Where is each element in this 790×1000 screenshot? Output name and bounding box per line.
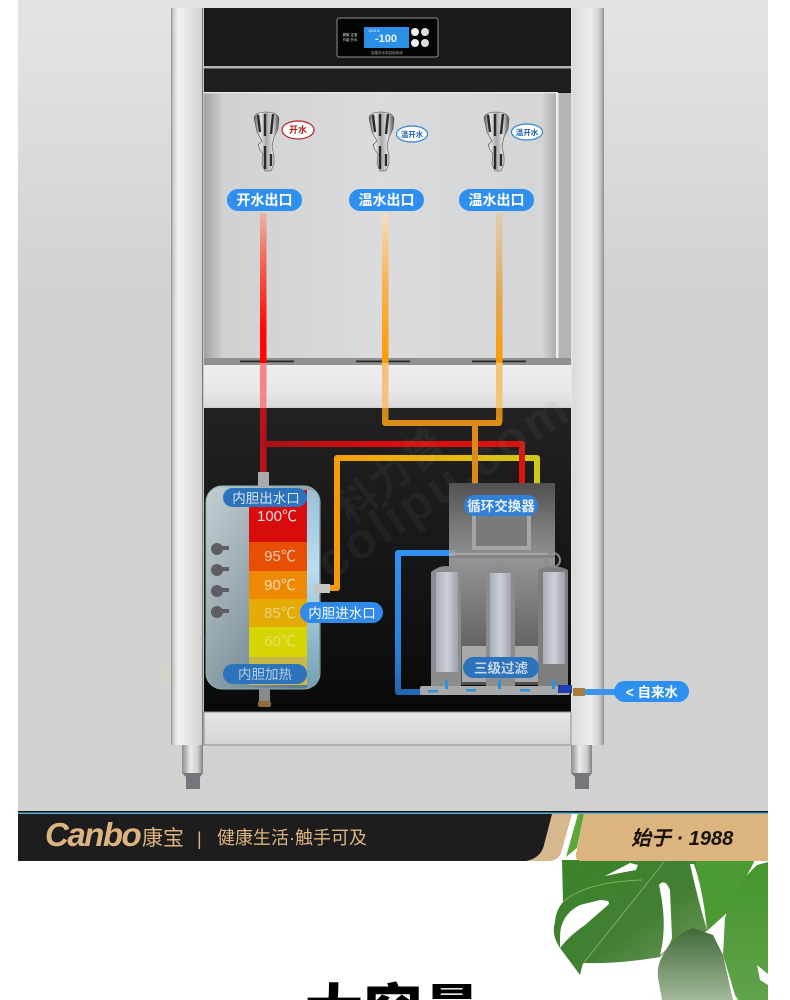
label: tank heating [223, 664, 307, 684]
temperature column: 90℃ [264, 577, 296, 594]
rear stub pipe [161, 665, 172, 685]
leaf: lower [658, 928, 733, 1000]
leaf: right [723, 862, 768, 1000]
slogan: | [197, 829, 202, 849]
leg: left [182, 745, 203, 789]
water dispenser cabinet [161, 8, 604, 789]
logo: Chinese name: 康宝 [142, 827, 184, 850]
leaf: right gap [757, 965, 768, 985]
leaf: gaps [560, 863, 707, 955]
control panel [337, 18, 438, 57]
label: tap water: < 自来水 [626, 684, 679, 700]
label: three-stage filter: 三级过滤 [474, 660, 528, 676]
shelf [204, 365, 571, 407]
leaf: right back section [690, 860, 755, 930]
vent slots [240, 360, 526, 362]
band: dark [18, 814, 552, 861]
control panel: 1115 8 [368, 28, 380, 33]
heat exchanger [449, 483, 555, 685]
watermark: www.colipu.com [188, 380, 580, 670]
leaf: sliver under tab [566, 814, 584, 857]
label: hot outlet [227, 189, 302, 211]
temperature column: 85℃ [264, 605, 296, 622]
pipe: blue filtered [398, 553, 455, 692]
label: warm outlet 2: 温水出口 [468, 192, 524, 208]
label: tank inlet: 内胆进水口 [308, 606, 376, 621]
label: warm outlet 1 [349, 189, 424, 211]
filter 1 [431, 566, 461, 686]
flow arrows [428, 680, 555, 692]
temperature column [249, 490, 307, 685]
brand band [18, 811, 768, 861]
filter 3 [538, 553, 568, 686]
label: three-stage filter [463, 657, 539, 678]
band: gold accent [526, 814, 572, 861]
control panel: 节能 开水 [343, 37, 358, 42]
post: left [171, 8, 204, 745]
leg: right [571, 745, 592, 789]
temperature column: 100℃ [257, 508, 297, 525]
post: right [571, 8, 604, 745]
leaf: midrib [563, 862, 664, 965]
label: warm outlet 1: 温水出口 [358, 192, 414, 208]
label: tank heating: 内胆加热 [238, 667, 292, 682]
sticker: warm water 1 [396, 126, 428, 142]
label: tank inlet [300, 602, 383, 623]
filter 2 [486, 566, 515, 686]
sticker: warm water 2 [512, 124, 542, 140]
pipe: yellow inlet [318, 458, 537, 588]
sticker: warm water 1: 温开水 [401, 129, 424, 139]
bottom plate [204, 712, 571, 745]
tap water inlet [558, 681, 689, 702]
label: hot outlet: 开水出口 [236, 192, 292, 208]
brand band: 健康生活·触手可及 [217, 828, 367, 848]
label: exchanger: 循环交换器 [467, 498, 535, 514]
faucet: warm 1 [369, 112, 394, 171]
temperature column: 95℃ [264, 548, 296, 565]
boiler tank [206, 472, 330, 707]
label: exchanger [464, 495, 538, 516]
background panel [18, 0, 768, 811]
top black panel [204, 8, 571, 93]
monstera leaves [554, 814, 768, 1000]
control panel: -100 [375, 33, 397, 45]
label: tank outlet: 内胆出水口 [232, 491, 300, 506]
watermark: 科力普 [328, 420, 455, 532]
lower black compartment [204, 408, 571, 712]
control panel: 健康 定宝 [343, 32, 358, 37]
band: tan tab [576, 814, 768, 861]
sticker: hot water [282, 121, 314, 139]
inlet stub [314, 584, 330, 593]
logo: Canbo: Canbo [45, 816, 142, 853]
heater stub [258, 689, 271, 707]
label: tank outlet [223, 488, 307, 507]
faucet: warm 2 [484, 112, 509, 171]
temperature column: 60℃ [264, 633, 296, 650]
leaf: large monstera [554, 860, 708, 975]
filter base [420, 686, 570, 695]
pipe: orange warm [382, 213, 502, 484]
control panel: 智能饮水机控制系统 [371, 50, 403, 55]
filter cartridges [420, 553, 570, 695]
outlet stub [258, 472, 269, 487]
pipe: red hot [260, 213, 522, 484]
sticker: hot water: 开水 [289, 124, 307, 135]
since 1988: 始于 · 1988 [631, 828, 734, 850]
label: warm outlet 2 [459, 189, 534, 211]
steel front panel [204, 92, 571, 365]
tank sensors [211, 543, 229, 618]
faucet: hot [254, 112, 279, 171]
sticker: warm water 2: 温开水 [516, 127, 539, 137]
